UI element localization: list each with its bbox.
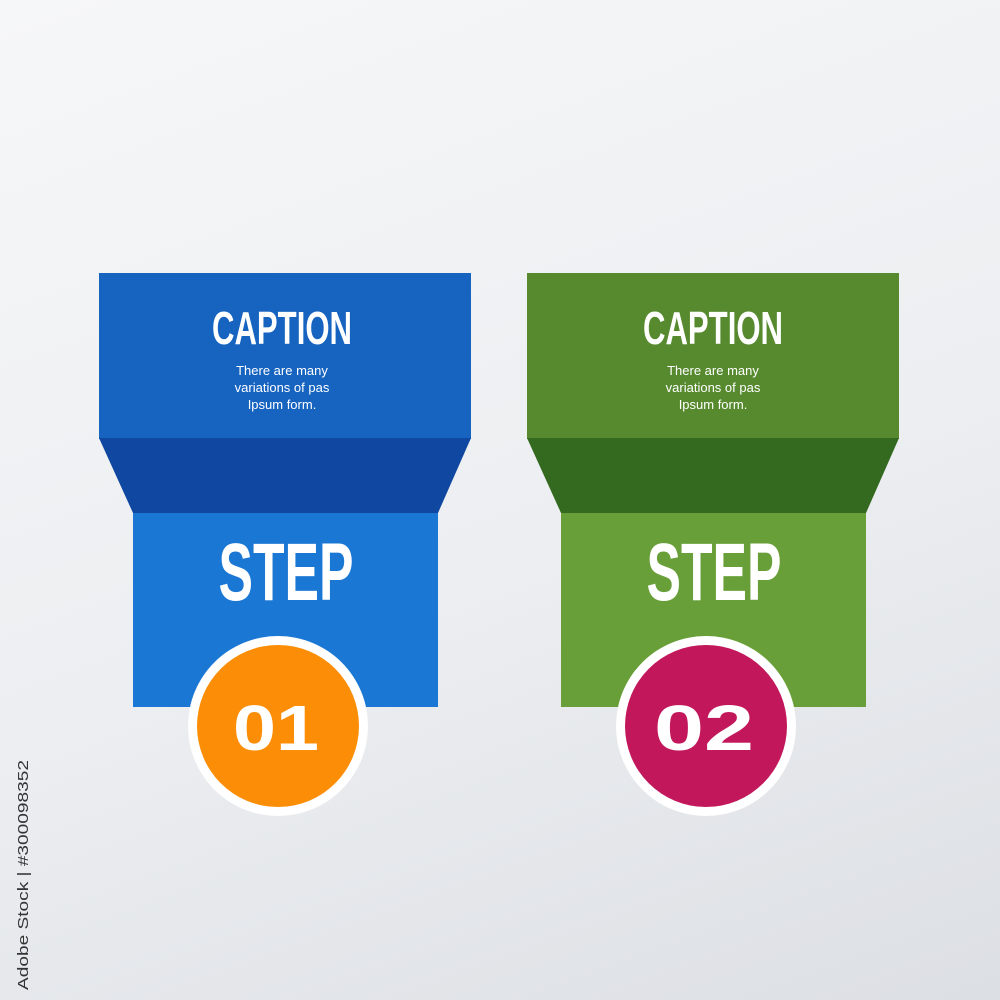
number badge 02: 02 bbox=[654, 692, 754, 764]
step box bbox=[561, 513, 866, 707]
step box bbox=[133, 513, 438, 707]
caption body text: Ipsum form. bbox=[248, 397, 316, 412]
top caption box bbox=[527, 273, 899, 439]
caption heading: CAPTION bbox=[212, 302, 352, 354]
folded trapezoid bbox=[527, 438, 899, 513]
folded trapezoid bbox=[99, 438, 471, 513]
panel: step 02 bbox=[527, 273, 899, 816]
step label: STEP bbox=[646, 527, 782, 618]
step label: STEP bbox=[218, 527, 354, 618]
caption body text: variations of pas bbox=[666, 380, 761, 395]
caption heading: CAPTION bbox=[643, 302, 783, 354]
watermark id text: Adobe Stock | #300098352 bbox=[15, 760, 32, 990]
number badge 01: 01 bbox=[233, 692, 319, 764]
caption body text: There are many bbox=[667, 363, 759, 378]
caption body text: There are many bbox=[236, 363, 328, 378]
caption body text: Ipsum form. bbox=[679, 397, 747, 412]
caption body text: variations of pas bbox=[235, 380, 330, 395]
top caption box bbox=[99, 273, 471, 439]
panel: step 01 bbox=[99, 273, 471, 816]
number badge 02 bbox=[616, 636, 796, 816]
number badge 01 bbox=[188, 636, 368, 816]
